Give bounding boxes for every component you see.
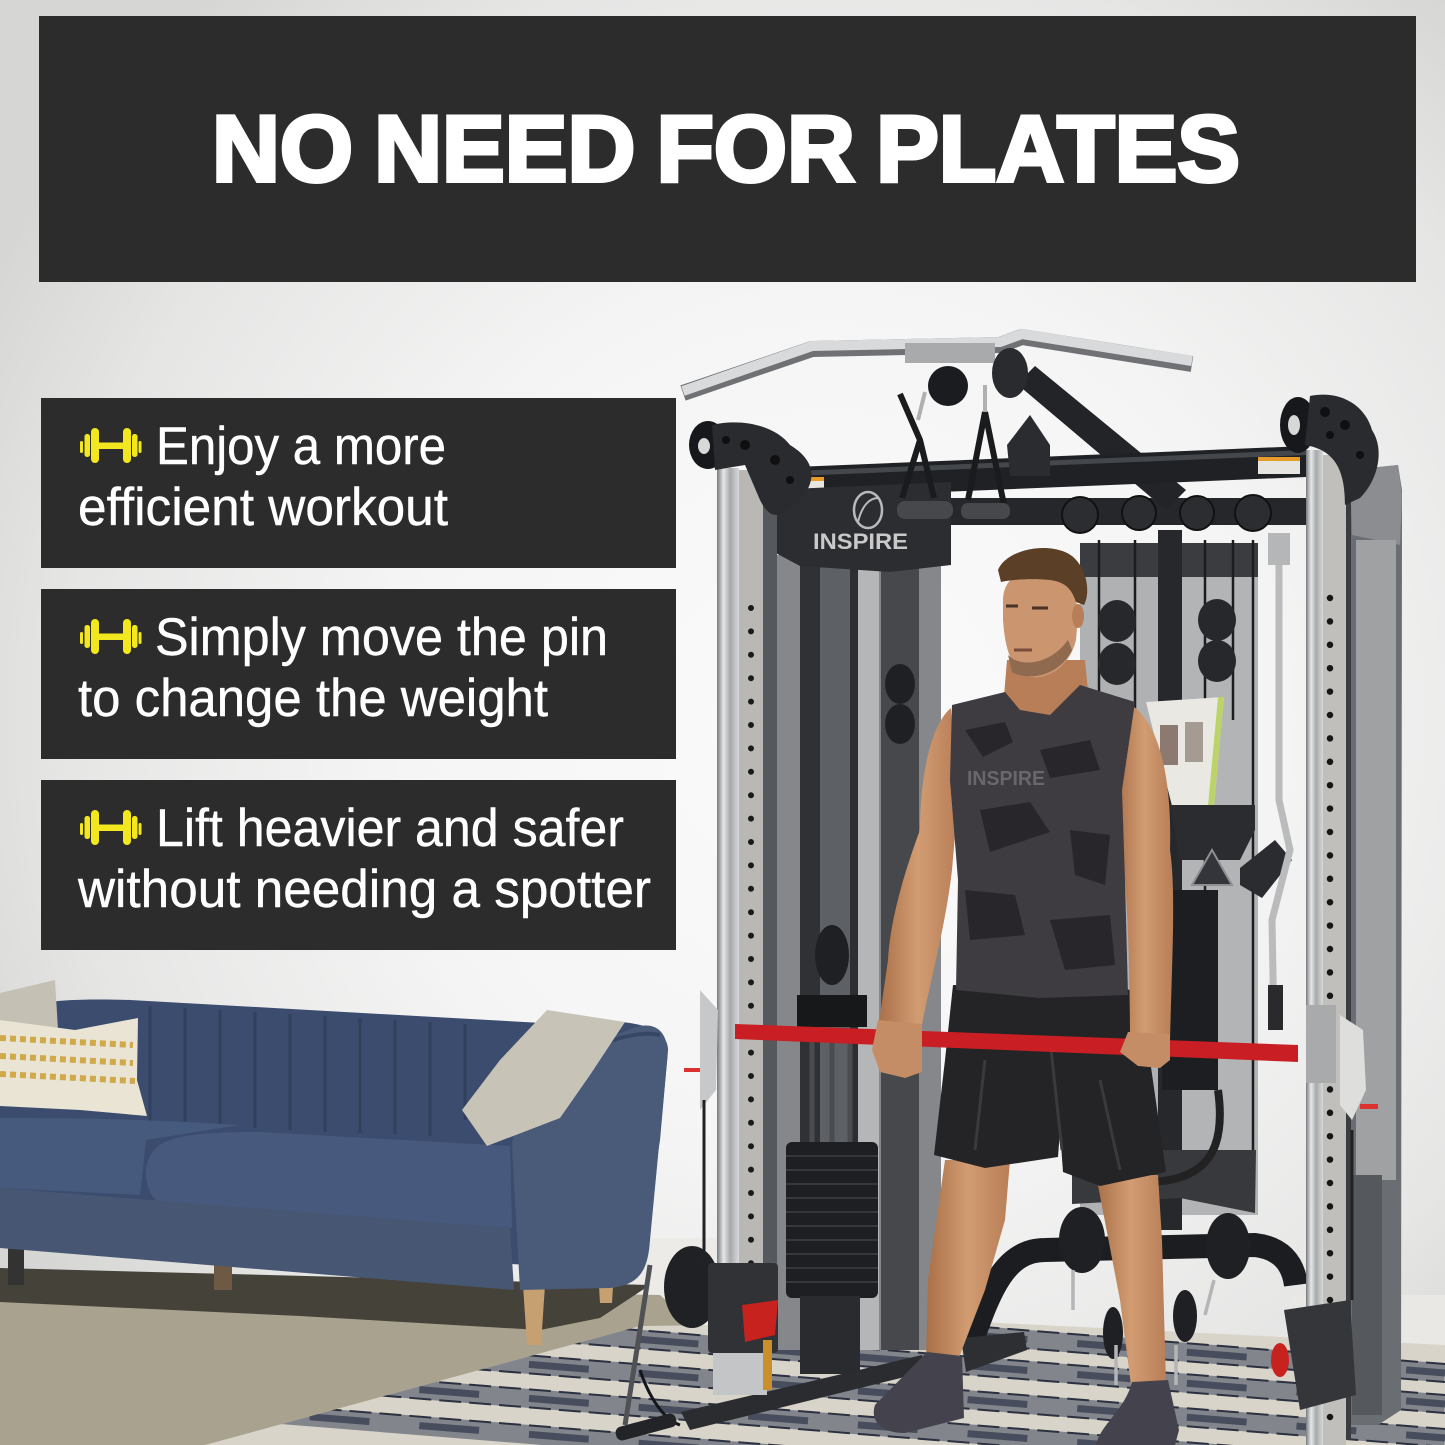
grey pillow — [0, 980, 58, 1030]
text: Simply move the pin — [155, 608, 608, 667]
gym machine: left floor unit with cable handle — [614, 990, 925, 1442]
carabiners — [1073, 1270, 1214, 1385]
lower mesh — [1072, 1150, 1256, 1213]
low pulleys — [1059, 1207, 1250, 1359]
logo shroud — [768, 482, 951, 572]
right pillow — [462, 1010, 625, 1146]
text: to change the weight — [78, 669, 548, 728]
icon: dumbbell — [80, 619, 142, 654]
sofa arm — [512, 1025, 668, 1290]
text: Enjoy a more — [156, 417, 446, 476]
rear mesh panels — [1080, 545, 1158, 1215]
gym machine: top pulleys and strap handles — [897, 348, 1050, 519]
tank top — [950, 685, 1135, 998]
tank camouflage — [965, 722, 1115, 970]
arm left — [878, 708, 958, 1035]
rear beam pulleys — [1062, 495, 1271, 533]
warning stickers — [783, 457, 1300, 494]
rear pulley pairs — [1098, 599, 1236, 685]
shorts — [934, 985, 1166, 1186]
shoes — [874, 1352, 1179, 1445]
sofa legs — [8, 1245, 614, 1345]
text: without needing a spotter — [77, 860, 651, 919]
gym machine: rear beam, crossbar and diagonal brace — [770, 366, 1306, 533]
icon: dumbbell — [80, 428, 142, 463]
gym machine: chrome lat pulldown bar — [683, 334, 1192, 393]
ankle strap — [1240, 840, 1292, 898]
text: Lift heavier and safer — [156, 799, 624, 858]
title banner — [39, 16, 1416, 282]
gym machine: left weight tower — [768, 482, 951, 1374]
INSPIRE logo — [813, 492, 908, 554]
sofa seat cushions — [0, 1118, 240, 1195]
sofa channel tufting — [150, 1006, 465, 1136]
legs — [926, 1160, 1166, 1385]
mid pulleys — [885, 664, 915, 704]
left tower panels — [776, 555, 941, 1350]
man — [874, 548, 1179, 1445]
head — [1003, 566, 1077, 677]
rear central post — [1158, 530, 1182, 1230]
shirt brand: INSPIRE — [967, 768, 1045, 790]
icon: dumbbell — [80, 810, 142, 845]
neck — [1003, 660, 1090, 735]
gym machine: right tower and upright — [1306, 450, 1402, 1445]
arm right — [1115, 703, 1173, 1040]
sofa back — [0, 1000, 668, 1270]
INSPIRE logo: INSPIRE — [813, 529, 908, 554]
accessory holder — [1170, 805, 1255, 860]
hanging triangle handle — [1192, 850, 1232, 885]
hair — [998, 548, 1087, 605]
panel: lift heavier — [41, 780, 676, 950]
guide rods — [812, 1040, 850, 1145]
weight stack — [786, 1142, 878, 1298]
panel: efficient workout — [41, 398, 676, 568]
man: hands — [872, 1020, 1170, 1078]
panel: move the pin — [41, 589, 676, 759]
eyes and mouth — [1006, 606, 1048, 650]
exercise book — [1146, 697, 1224, 806]
back pad — [1162, 890, 1218, 1090]
gym machine: right floor unit and slide — [1271, 1005, 1378, 1410]
sofa base — [0, 1188, 514, 1290]
gym machine: left top pulley housing — [689, 421, 811, 515]
gym machine: left upright — [717, 468, 777, 1328]
rug — [206, 1322, 1445, 1445]
top weight plates — [797, 995, 867, 1027]
base arc — [972, 1245, 1296, 1340]
curl bar — [1272, 535, 1290, 1030]
title text: NO NEED FOR PLATES — [212, 96, 1240, 201]
gym machine: rear panels and weights — [961, 530, 1296, 1385]
yellow striped pillow — [0, 1018, 147, 1116]
gym machine: right top pulley housing — [1280, 395, 1379, 505]
red barbell — [735, 1024, 1298, 1062]
photo background: baseboard and concrete floor — [0, 1238, 1445, 1445]
text: efficient workout — [78, 478, 448, 537]
sofa — [0, 980, 668, 1345]
